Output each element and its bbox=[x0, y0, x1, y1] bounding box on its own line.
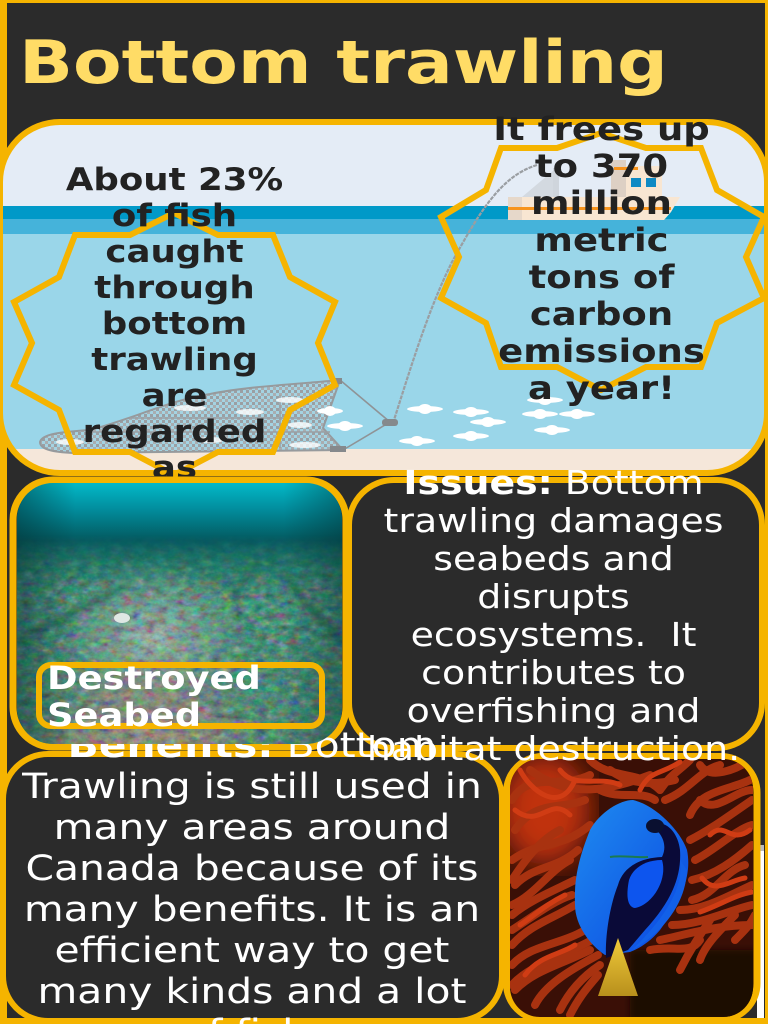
text: issues: trawling damages bbox=[384, 503, 723, 540]
caption: destroyed seabed: Destroyed bbox=[47, 660, 261, 697]
callout: 23% of fish statistic: of fish bbox=[112, 197, 237, 233]
callout: 23% of fish statistic: bottom bbox=[102, 305, 247, 341]
callout: 23% of fish statistic: are bbox=[142, 377, 207, 413]
trawl net bbox=[40, 378, 398, 453]
callout: 370 million tons carbon statistic: million bbox=[531, 185, 672, 222]
sea surface bands bbox=[0, 206, 768, 234]
callout: 370 million tons carbon statistic bbox=[441, 111, 764, 407]
callout: 23% of fish statistic: About 23% bbox=[66, 161, 283, 197]
photo: destroyed seabed bbox=[17, 483, 342, 744]
panel: trawling scene illustration bbox=[0, 122, 768, 475]
icon: blue tang fish bbox=[575, 800, 688, 996]
callout: 370 million tons carbon statistic: to 370 bbox=[535, 148, 668, 185]
text: benefits: many benefits. It is an bbox=[24, 889, 480, 929]
title: Bottom trawling bbox=[19, 28, 668, 98]
callout: 370 million tons carbon statistic: tons of bbox=[529, 259, 675, 296]
text: benefits: many areas around bbox=[54, 807, 450, 847]
callout: 370 million tons carbon statistic: metric bbox=[534, 222, 669, 259]
panel: issues background bbox=[349, 480, 762, 748]
caption: destroyed seabed: Seabed bbox=[47, 697, 201, 734]
trawl cable bbox=[394, 165, 537, 420]
caption: destroyed seabed bbox=[39, 660, 322, 734]
callout: 370 million tons carbon statistic: carbon bbox=[530, 296, 673, 333]
callout: 23% of fish statistic: regarded bbox=[83, 413, 266, 449]
text: issues: Issues: Bottom bbox=[403, 465, 704, 502]
callout: 370 million tons carbon statistic: emissions bbox=[498, 333, 705, 370]
text: benefits: Benefits: Bottom bbox=[68, 725, 436, 765]
panel: fish photo bbox=[500, 755, 760, 1020]
text: benefits: many kinds and a lot bbox=[38, 971, 466, 1011]
callout: 370 million tons carbon statistic: a year! bbox=[528, 370, 675, 407]
text: issues: ecosystems. It bbox=[411, 617, 696, 654]
callout: 23% of fish statistic: caught bbox=[105, 233, 244, 269]
text: issues: overfishing and bbox=[407, 693, 700, 730]
fish tail bbox=[598, 938, 638, 996]
text: issues: habitat destruction. bbox=[367, 731, 740, 768]
panel: benefits background bbox=[3, 754, 502, 1021]
text: issues: contributes to bbox=[421, 655, 686, 692]
white sliver beside fish photo bbox=[757, 845, 764, 1018]
callout: 23% of fish statistic: trawling bbox=[91, 341, 258, 377]
text: benefits: efficient way to get bbox=[55, 930, 449, 970]
water bbox=[0, 234, 768, 450]
anemone background bbox=[500, 755, 760, 1020]
photo frame: seabed bbox=[13, 480, 346, 747]
sky bbox=[0, 122, 768, 206]
text: benefits: Canada because of its bbox=[25, 848, 479, 888]
text: benefits: Trawling is still used in bbox=[21, 766, 482, 806]
text: issues: disrupts bbox=[477, 579, 630, 616]
callout: 370 million tons carbon statistic: It frees up bbox=[493, 111, 710, 148]
school of fish bbox=[317, 395, 595, 446]
icon: fishing boat bbox=[508, 160, 680, 220]
sandy sea floor bbox=[16, 449, 752, 470]
callout: 23% of fish statistic: as bbox=[152, 449, 197, 485]
text: issues: seabeds and bbox=[433, 541, 674, 578]
callout: 23% of fish statistic bbox=[14, 161, 335, 485]
callout: 23% of fish statistic: through bbox=[94, 269, 255, 305]
